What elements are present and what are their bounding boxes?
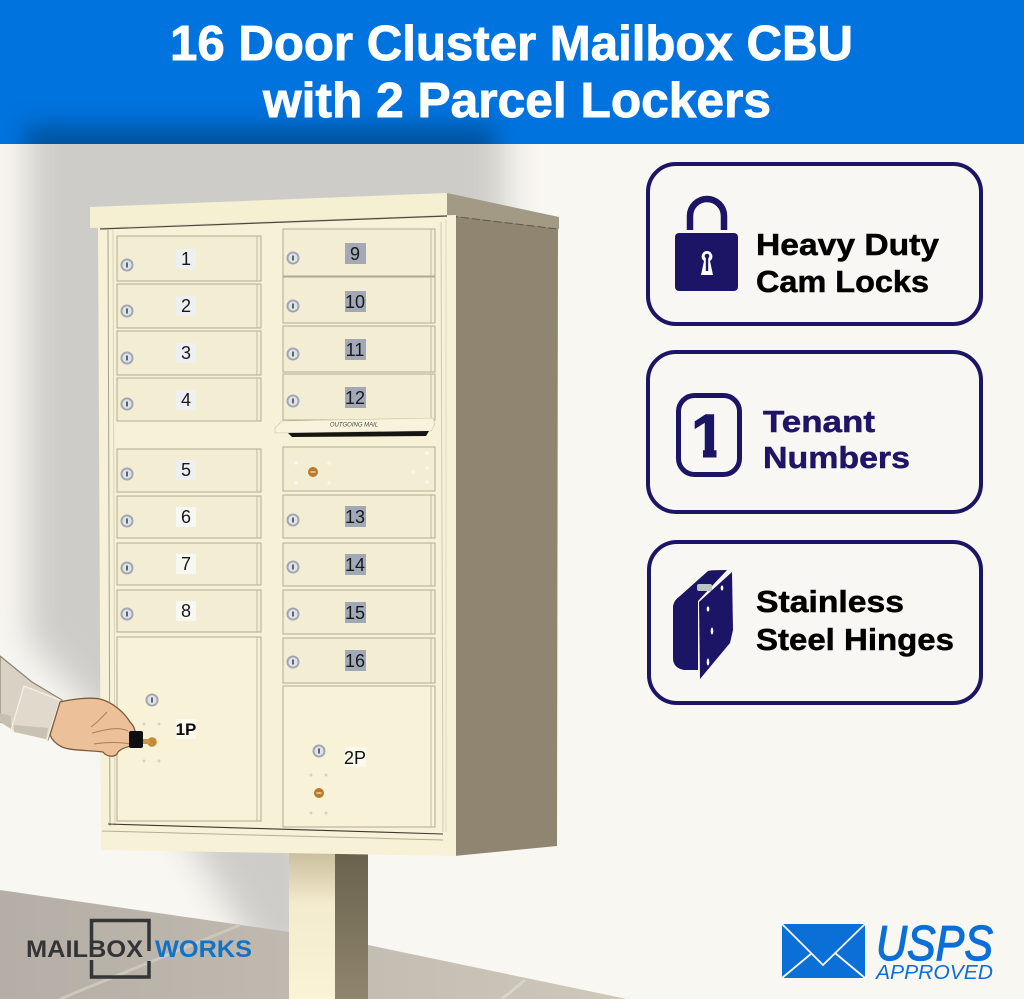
post (289, 853, 368, 999)
door 10: 10 (345, 292, 365, 312)
door 4 (117, 378, 261, 421)
door 7: 7 (181, 554, 191, 574)
door 13: 13 (345, 507, 365, 527)
door 8 (117, 590, 261, 632)
door 1: 1 (181, 249, 191, 269)
door 8: 8 (181, 601, 191, 621)
text: tenant numbers: Numbers (763, 440, 910, 475)
card: tenant numbers (648, 352, 981, 512)
logo: mailbox works: WORKS (155, 936, 252, 963)
door 4: 4 (181, 390, 191, 410)
hand with key (0, 656, 157, 756)
card: stainless steel hinges (649, 542, 981, 703)
text: tenant numbers: Tenant (763, 404, 875, 439)
logo: mailbox works (26, 920, 252, 977)
door 14 (283, 543, 435, 586)
text: stainless steel hinges: Stainless (756, 584, 904, 619)
door 10 (283, 277, 435, 323)
side panel (454, 214, 558, 856)
icon: envelope (782, 924, 865, 978)
cabinet front (98, 215, 456, 856)
door 16: 16 (345, 651, 365, 671)
key (129, 731, 157, 748)
hand (50, 698, 135, 756)
door 3 (117, 331, 261, 375)
door 11 (283, 326, 435, 372)
logo: usps approved: USPS (876, 917, 993, 971)
sleeve (0, 656, 62, 740)
wall shadow behind mailbox (28, 70, 505, 960)
card: heavy duty cam locks (648, 164, 981, 324)
icon: number one tile: 1 (691, 402, 725, 470)
door 1 (117, 236, 261, 281)
door 9 (283, 229, 435, 276)
door 5 (117, 449, 261, 492)
door 14: 14 (345, 555, 365, 575)
door 5: 5 (181, 460, 191, 480)
door 9: 9 (350, 244, 360, 264)
title: with 2 Parcel Lockers (262, 74, 771, 128)
door 12: 12 (345, 388, 365, 408)
floor (0, 890, 627, 999)
parcel locker 2P (283, 686, 435, 827)
text: stainless steel hinges: Steel Hinges (756, 622, 954, 657)
icon: number one tile (678, 396, 740, 474)
mailbox unit (90, 193, 559, 856)
door 2: 2 (181, 296, 191, 316)
icon: padlock (675, 199, 738, 291)
door 7 (117, 543, 261, 585)
logo: usps approved (782, 917, 993, 984)
parcel locker 1P (117, 637, 261, 821)
door 15 (283, 590, 435, 634)
header banner (0, 0, 1024, 144)
logo: mailbox works: MAILBOX (26, 936, 143, 963)
blank master door (283, 447, 435, 491)
door 2 (117, 284, 261, 328)
door 16 (283, 638, 435, 683)
logo: usps approved: APPROVED (875, 962, 993, 984)
title: 16 Door Cluster Mailbox CBU (170, 17, 853, 71)
door 6: 6 (181, 507, 191, 527)
door 3: 3 (181, 343, 191, 363)
text: heavy duty cam locks: Cam Locks (756, 264, 929, 299)
icon: hinge (673, 570, 733, 679)
door 6 (117, 496, 261, 538)
door 13 (283, 495, 435, 538)
text: heavy duty cam locks: Heavy Duty (756, 227, 940, 262)
text: tenant numbers (763, 404, 910, 475)
outgoing mail slot (275, 418, 435, 437)
door 15: 15 (345, 603, 365, 623)
outgoing mail slot: OUTGOING MAIL (330, 422, 378, 428)
parcel locker 2P: 2P (344, 748, 366, 768)
door 12 (283, 374, 435, 420)
parcel locker 1P: 1P (176, 720, 196, 739)
text: stainless steel hinges (756, 584, 954, 657)
text: heavy duty cam locks (756, 227, 940, 299)
roof (90, 193, 447, 228)
title (170, 17, 853, 128)
door 11: 11 (346, 340, 364, 360)
